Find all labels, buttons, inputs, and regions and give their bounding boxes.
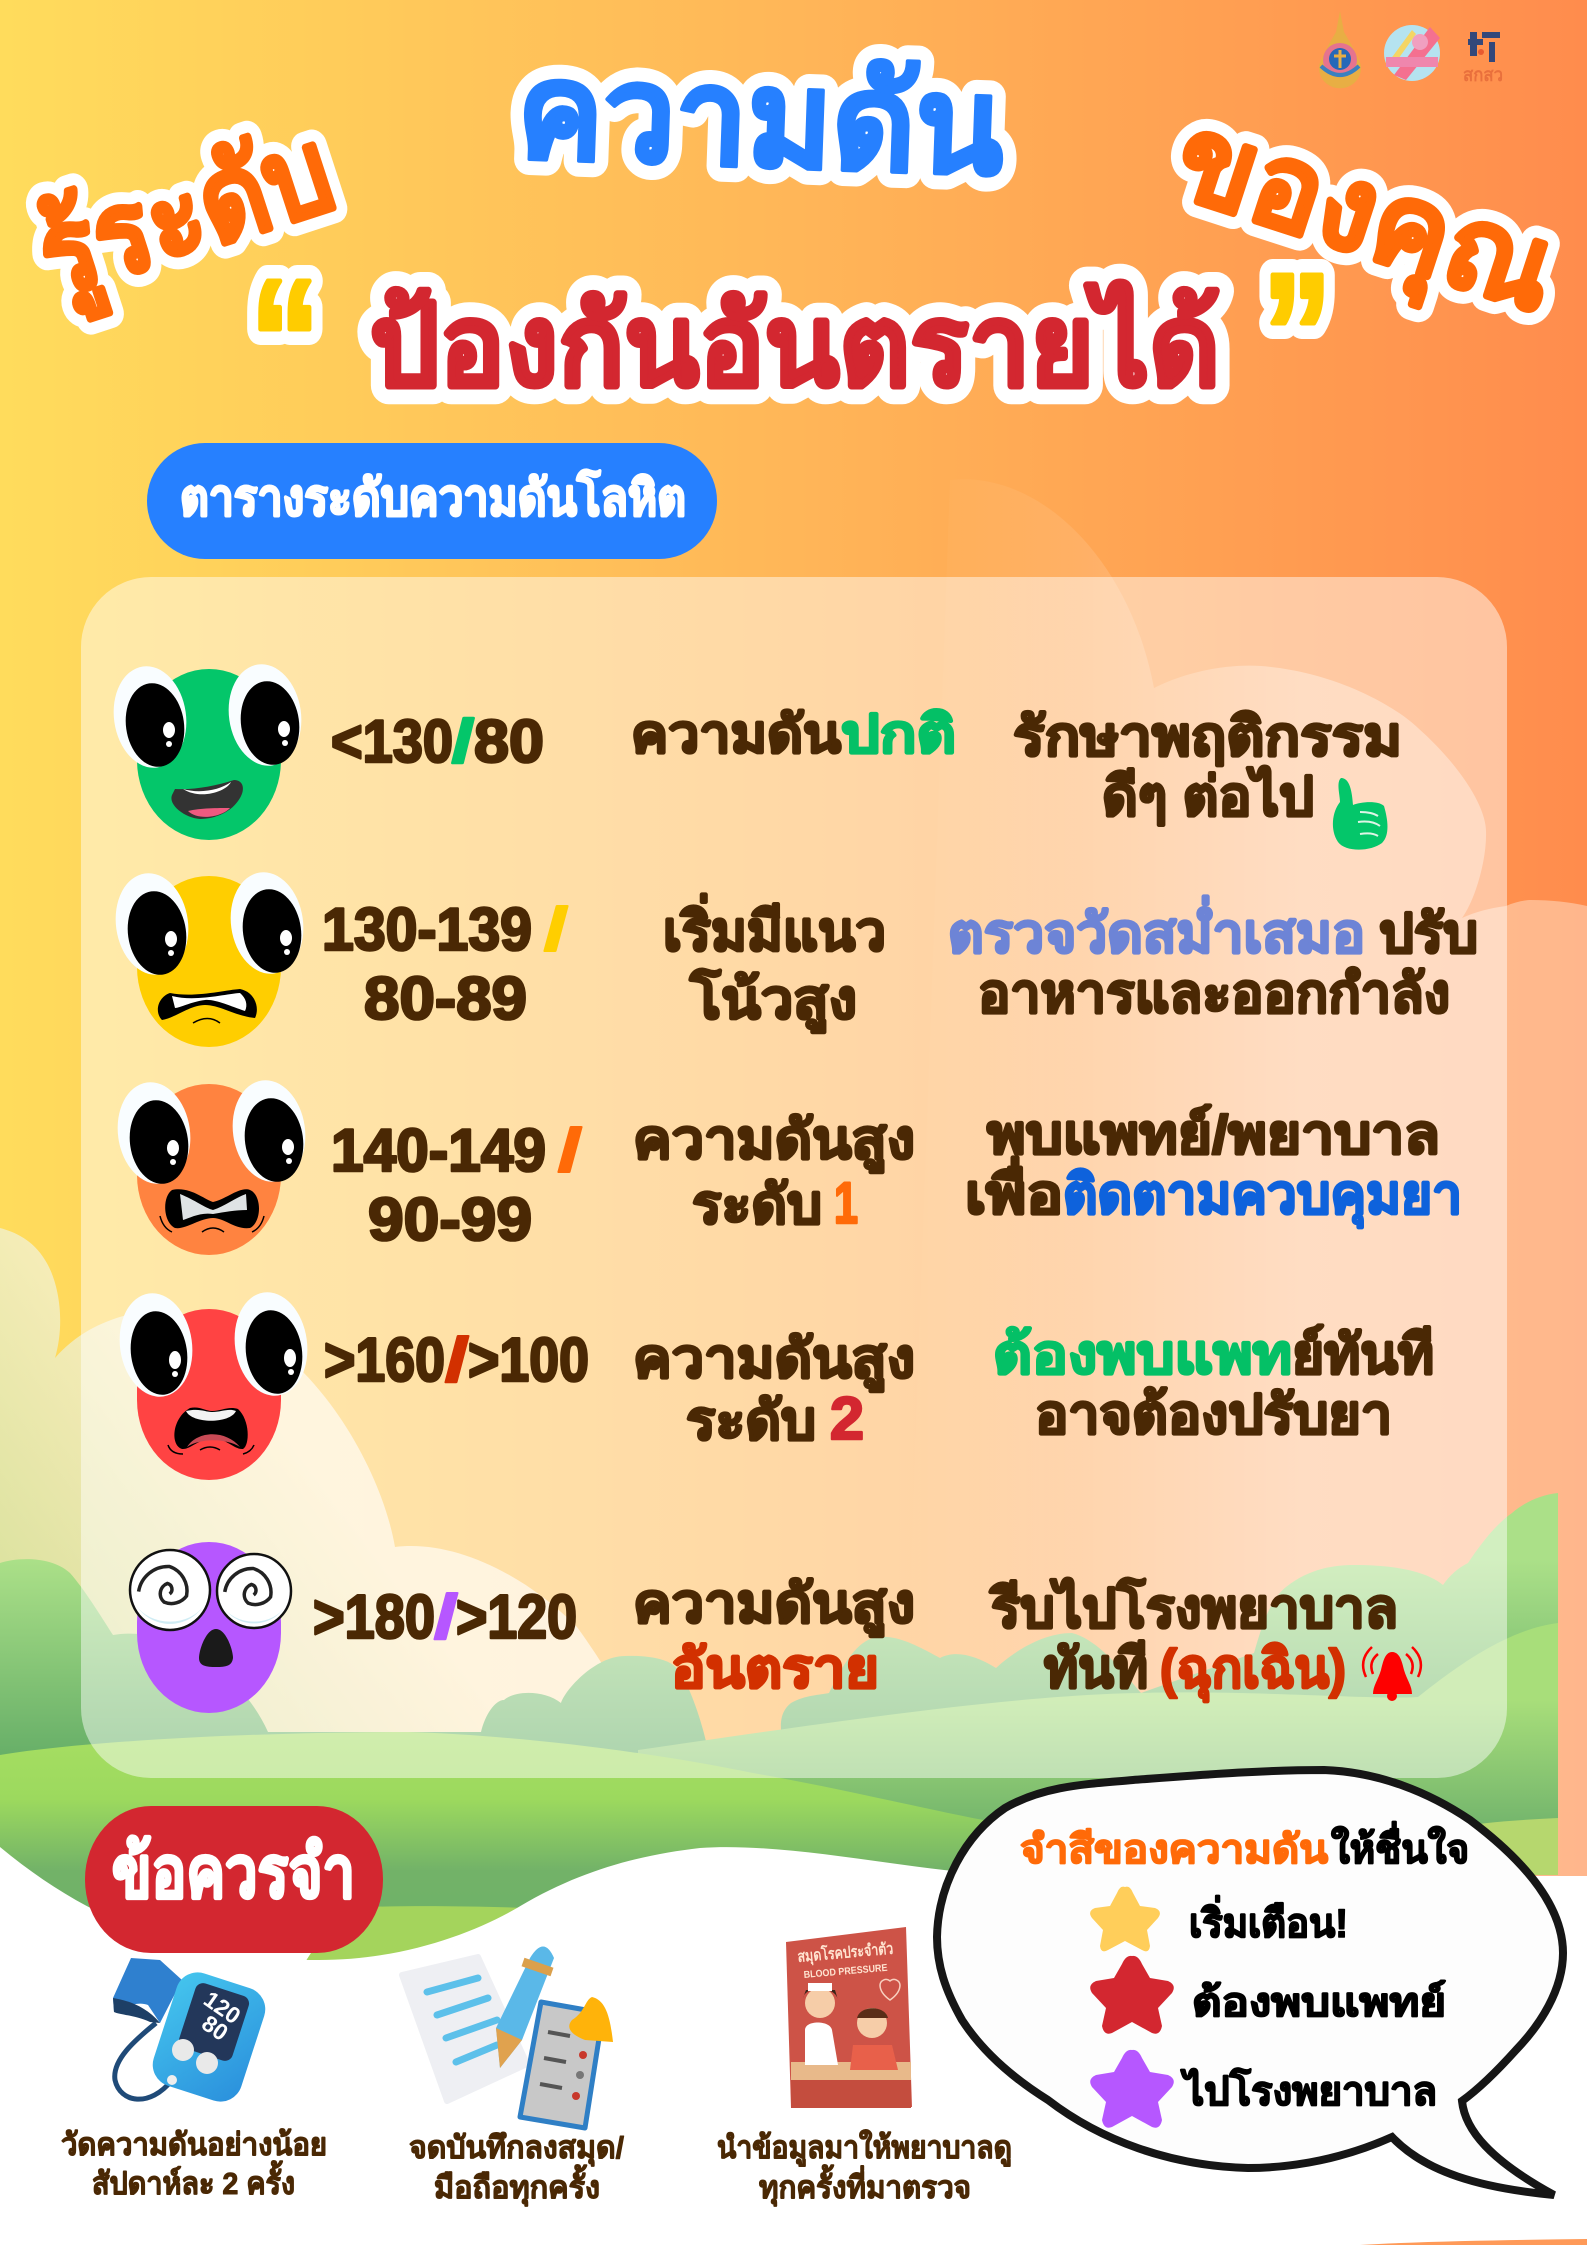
icon: blood pressure monitor	[113, 1958, 271, 2107]
advice: measure regularly: ปรับ	[1379, 904, 1478, 964]
caption: record each time: จดบันทึกลงสมุด/	[409, 2130, 624, 2167]
reading: <130/80	[331, 708, 544, 775]
advice: keep it up: ดีๆ ต่อไป	[1102, 765, 1314, 827]
reading: <130/80: 80	[474, 708, 544, 775]
status: ความดันปกติ	[631, 706, 956, 764]
opening quote: “	[250, 245, 320, 435]
logo: สกสว	[1463, 32, 1503, 86]
legend heading: จำสีของความดัน	[1020, 1828, 1328, 1872]
title: รู้ระดับ: รู้ระดับ	[22, 104, 351, 329]
title: ของคุณ: ของคุณ	[1157, 89, 1572, 345]
title: ป้องกันอันตรายได้: ป้องกันอันตรายได้	[370, 281, 1220, 410]
opening quote: “	[250, 245, 320, 435]
orange sliver at the bottom edge	[1360, 2239, 1587, 2245]
icon: emergency bell	[1363, 1647, 1421, 1701]
advice: see doctor: เพื่อ	[965, 1156, 1063, 1225]
speech bubble: colour legend	[937, 1770, 1563, 2195]
legend: red star	[1090, 1956, 1446, 2034]
icon: blood pressure monitor: 120	[199, 1986, 245, 2029]
advice: rush to hospital	[989, 1577, 1398, 1703]
reading: 140-149 / 90-99	[331, 1117, 582, 1253]
hill: bottom right highlight	[1482, 1818, 1558, 1875]
advice: rush to hospital: รีบไปโรงพยาบาล	[989, 1577, 1398, 1639]
icon: health notebook: BLOOD PRESSURE	[803, 1963, 888, 1981]
advice: see doctor immediately: ย์ทันที	[1292, 1324, 1434, 1385]
heading pill: remember	[85, 1806, 383, 1953]
icon: thumbs up	[1333, 778, 1388, 850]
logo: สกสว: สกสว	[1463, 65, 1503, 86]
face: green happy	[107, 659, 308, 840]
legend: yellow star	[1090, 1887, 1348, 1951]
advice: rush to hospital: (ฉุกเฉิน)	[1160, 1639, 1346, 1703]
caption: weekly measurement: วัดความดันอย่างน้อย	[61, 2127, 327, 2162]
cloud: top right	[900, 479, 1587, 1876]
title: ความดัน: ความดัน	[515, 37, 1006, 202]
icon: blood pressure monitor: 80	[197, 2010, 233, 2046]
caption: show nurse: ทุกครั้งที่มาตรวจ	[759, 2164, 971, 2207]
advice: see doctor immediately: ต้องพบแพท	[993, 1325, 1292, 1385]
legend heading	[1020, 1821, 1469, 1872]
title	[22, 37, 1572, 435]
status: ความดันปกติ: ปกติ	[841, 706, 956, 764]
reading: >180/>120	[313, 1583, 577, 1652]
heading pill: remember: ข้อควรจำ	[112, 1833, 355, 1913]
reading: <130/80: <130	[331, 708, 453, 775]
reading: >180/>120: >180	[313, 1583, 435, 1652]
face: red distressed	[113, 1287, 314, 1480]
status: dangerous: ความดันสูง	[633, 1574, 915, 1637]
logo: stroke campaign	[1384, 25, 1440, 81]
status: stage 1: 1	[834, 1171, 858, 1236]
reading: 130-139 / 80-89: 80-89	[364, 965, 527, 1032]
caption: show nurse	[717, 2129, 1012, 2207]
caption: weekly measurement	[61, 2127, 327, 2201]
reading: <130/80: /	[452, 708, 474, 775]
row 2 warning	[109, 867, 1478, 1047]
reading: >160/>100: >160	[324, 1326, 445, 1395]
status: stage 2: ระดับ	[686, 1391, 816, 1451]
reading: 130-139 / 80-89: 130-139	[322, 896, 532, 963]
status: stage 2: ความดันสูง	[633, 1329, 915, 1392]
bubble outline	[937, 1770, 1563, 2195]
hill: right foreground	[638, 1623, 1558, 1824]
row 3 stage 1	[111, 1075, 1462, 1255]
legend: purple star: ไปโรงพยาบาล	[1180, 2068, 1437, 2114]
heading pill: table title: ตารางระดับความดันโลหิต	[180, 468, 686, 526]
status: stage 1: ระดับ	[692, 1175, 822, 1235]
status: เริ่มมีแนวโน้วสูง: เริ่มมีแนว	[663, 893, 886, 962]
reading: >160/>100: /	[445, 1326, 469, 1395]
hill: small front bright	[300, 1906, 530, 1970]
hill: left bright foreground	[0, 1732, 1100, 1940]
reading: >180/>120: >120	[456, 1583, 577, 1652]
translucent table panel	[81, 577, 1507, 1778]
reading: >180/>120: /	[434, 1583, 458, 1652]
tip 3: bring data	[717, 1927, 1012, 2207]
closing quote: ”	[1262, 239, 1332, 429]
advice: see doctor immediately: อาจต้องปรับยา	[1035, 1385, 1392, 1445]
status: stage 2: 2	[830, 1385, 864, 1452]
caption: record each time: มือถือทุกครั้ง	[434, 2164, 600, 2207]
title: ของคุณ: ของคุณ	[1157, 89, 1572, 345]
advice: see doctor immediately	[993, 1324, 1434, 1445]
advice: keep it up	[1013, 707, 1402, 827]
reading: >160/>100	[324, 1326, 589, 1395]
face: purple dizzy	[130, 1542, 291, 1713]
reading: 140-149 / 90-99: 140-149	[331, 1117, 546, 1184]
legend: yellow star: เริ่มเตือน!	[1189, 1895, 1348, 1946]
status: stage 2	[633, 1329, 915, 1452]
title: รู้ระดับ: รู้ระดับ	[22, 104, 351, 329]
white wave bottom section	[0, 1847, 1587, 2245]
advice: see doctor: ติดตามควบคุมยา	[1063, 1165, 1462, 1229]
reading: 130-139 / 80-89: /	[544, 896, 568, 963]
title: ป้องกันอันตรายได้: ป้องกันอันตรายได้	[370, 281, 1220, 410]
reading: 140-149 / 90-99: /	[558, 1117, 582, 1184]
face: yellow nervous	[109, 867, 310, 1047]
heading pill: table title	[147, 443, 717, 559]
status: dangerous: อันตราย	[671, 1639, 879, 1699]
reading: 130-139 / 80-89	[322, 896, 568, 1032]
status: ความดันปกติ: ความดัน	[631, 706, 841, 764]
face: orange gritting	[111, 1075, 312, 1255]
hills: green tree line	[0, 1493, 1558, 1755]
legend: purple star	[1090, 2050, 1437, 2128]
caption: weekly measurement: สัปดาห์ละ 2 ครั้ง	[92, 2160, 295, 2201]
advice: see doctor: พบแพทย์/พยาบาล	[987, 1104, 1440, 1165]
caption: record each time	[409, 2130, 624, 2207]
reading: >160/>100: >100	[468, 1326, 589, 1395]
icon: notes pen and phone	[402, 1946, 613, 2128]
status: stage 1	[633, 1110, 915, 1236]
tip 1: measure pressure	[61, 1958, 327, 2201]
legend: red star: ต้องพบแพทย์	[1192, 1980, 1446, 2025]
reading: 140-149 / 90-99: 90-99	[368, 1186, 532, 1253]
status: dangerous	[633, 1574, 915, 1699]
tip 2: record	[402, 1946, 624, 2207]
advice: measure regularly	[948, 895, 1478, 1024]
advice: see doctor	[965, 1104, 1462, 1229]
legend heading: ให้ชื่นใจ	[1331, 1821, 1469, 1872]
logo: royal crest	[1319, 11, 1361, 88]
status: stage 1: ความดันสูง	[633, 1110, 915, 1173]
advice: keep it up: รักษาพฤติกรรม	[1013, 707, 1402, 767]
status: เริ่มมีแนวโน้วสูง	[663, 893, 886, 1033]
row 5 dangerous	[130, 1542, 1421, 1713]
advice: rush to hospital: ทันที	[1044, 1639, 1148, 1699]
row 4 stage 2	[113, 1287, 1434, 1480]
advice: measure regularly: อาหารและออกกำลัง	[978, 964, 1450, 1024]
logos	[1319, 11, 1503, 88]
icon: health notebook	[786, 1927, 912, 2108]
title: ความดัน: ความดัน	[515, 37, 1006, 202]
status: เริ่มมีแนวโน้วสูง: โน้วสูง	[689, 968, 857, 1033]
advice: measure regularly: ตรวจวัดสม่ำเสมอ	[948, 895, 1365, 964]
icon: health notebook: สมุดโรคประจำตัว	[797, 1938, 894, 1967]
row 1 normal	[107, 659, 1402, 850]
background landscape	[0, 479, 1587, 1970]
caption: show nurse: นำข้อมูลมาให้พยาบาลดู	[717, 2129, 1012, 2167]
closing quote: ”	[1262, 239, 1332, 429]
cloud: left cream	[0, 1228, 620, 1876]
